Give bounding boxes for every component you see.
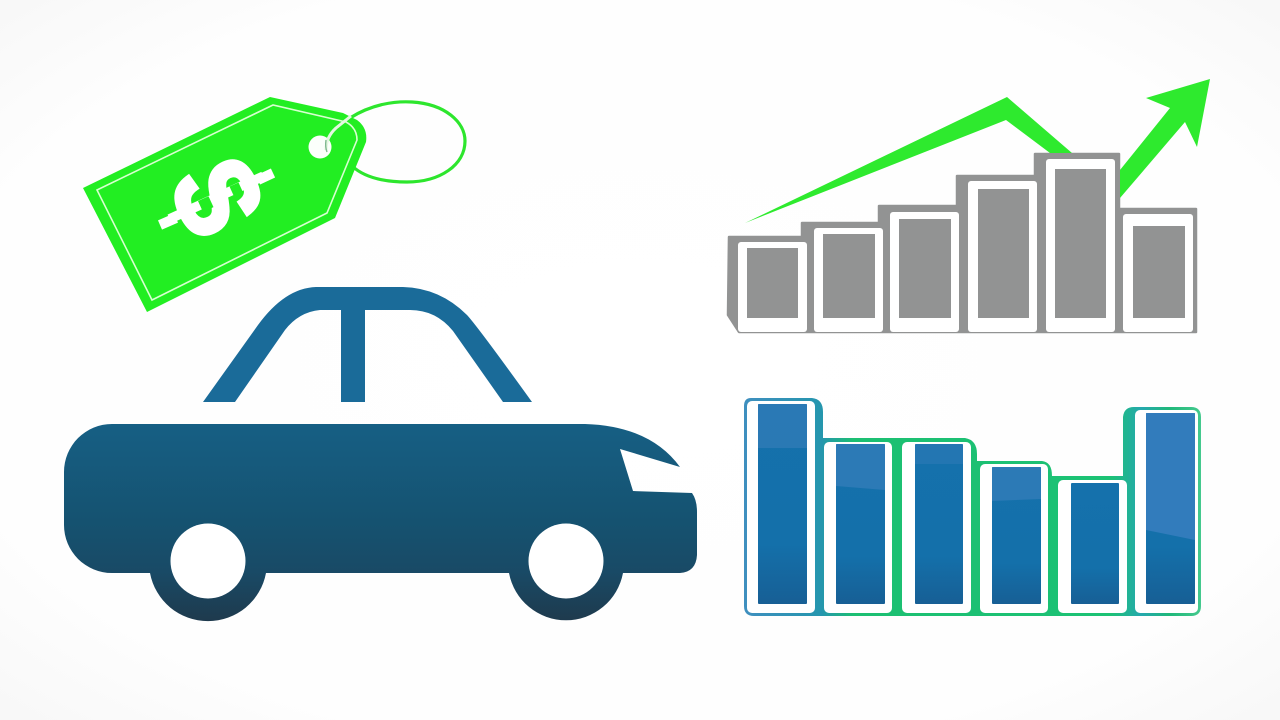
tag hole xyxy=(308,136,332,158)
bar 6 xyxy=(1135,410,1198,613)
chart: grey rising bars xyxy=(728,79,1210,332)
bar 3 xyxy=(890,212,959,332)
dollar bar stubs xyxy=(160,173,273,225)
tag inner outline xyxy=(97,105,357,300)
car body xyxy=(64,424,697,621)
bar 3 xyxy=(902,442,971,613)
gaps in dollar bar xyxy=(200,188,241,206)
string end inside hole xyxy=(326,140,327,152)
tag string loop xyxy=(350,102,465,182)
bar 1 xyxy=(738,242,807,332)
bar 5 xyxy=(1058,480,1127,613)
bar 4 xyxy=(980,464,1048,613)
grey bars backing xyxy=(728,154,1196,332)
car roof and pillars xyxy=(203,287,532,402)
dollar sign: $ xyxy=(142,139,292,255)
rear wheel hub xyxy=(528,524,604,598)
icon: green price tag xyxy=(83,97,465,312)
bar 2 xyxy=(824,442,892,613)
bar 5 xyxy=(1046,159,1115,332)
front wheel hub xyxy=(170,524,246,598)
teal-green bars backing xyxy=(744,398,1201,616)
chart: blue bars xyxy=(744,398,1201,616)
tag string knot xyxy=(326,116,351,150)
icon: car xyxy=(64,287,697,621)
tag body xyxy=(83,97,366,312)
green trend arrow, head xyxy=(1120,79,1210,198)
bar 6 xyxy=(1123,214,1193,332)
bar 1 xyxy=(747,401,815,613)
bar 2 xyxy=(814,228,883,332)
green trend arrow, left segment xyxy=(745,97,1072,223)
bar 4 xyxy=(968,181,1037,332)
